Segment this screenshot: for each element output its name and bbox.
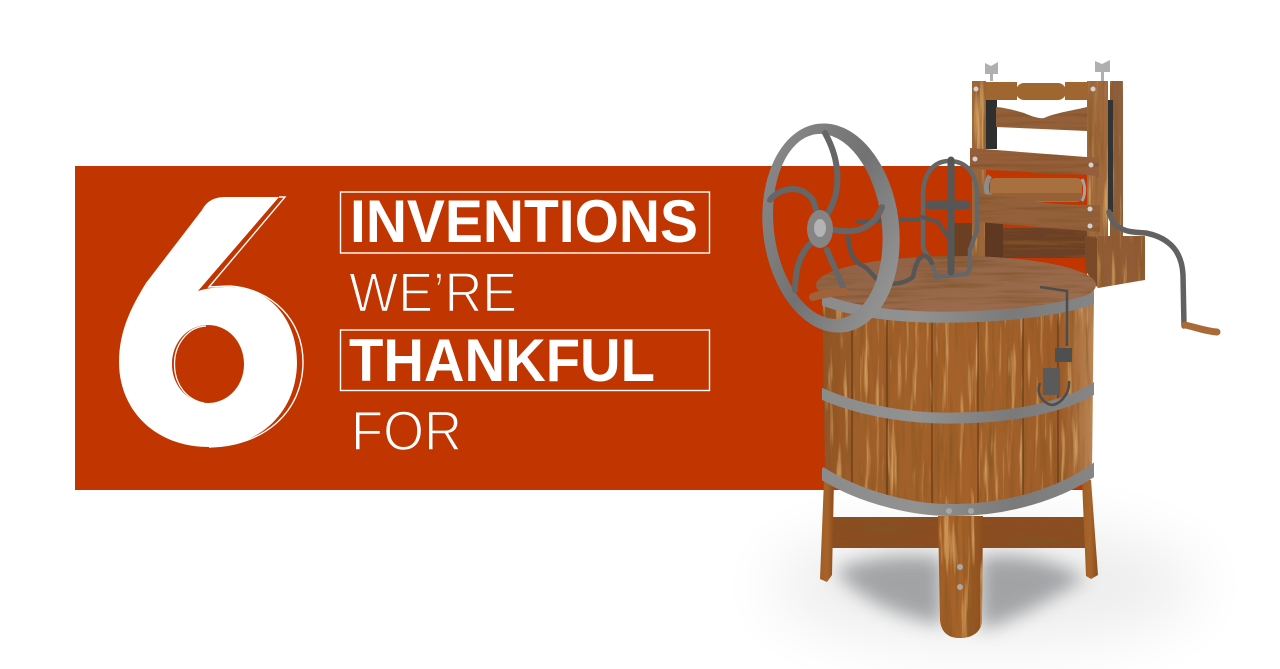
lower board xyxy=(978,193,1100,232)
heading: FOR: FOR xyxy=(351,399,462,462)
spring xyxy=(986,100,997,149)
wheel handle xyxy=(813,292,844,297)
heading: THANKFUL: THANKFUL xyxy=(349,327,655,394)
agitator mechanism xyxy=(848,160,977,284)
red banner xyxy=(75,166,1087,490)
barrel lid xyxy=(816,256,1096,314)
floor shadow xyxy=(770,525,1200,645)
wringer frame xyxy=(953,60,1145,288)
top handle bar xyxy=(986,82,1088,100)
legs xyxy=(820,480,1098,582)
roller xyxy=(990,178,1082,202)
side box xyxy=(1085,236,1145,288)
bolts xyxy=(972,86,1096,228)
big numeral 6 xyxy=(119,197,303,447)
metal bands xyxy=(818,297,1098,510)
washing machine illustration xyxy=(751,60,1217,645)
thumb screws xyxy=(985,60,1110,81)
heading: WE'RE: WE’RE xyxy=(349,260,517,324)
flywheel xyxy=(751,115,911,341)
cross board xyxy=(970,148,1099,177)
upper board xyxy=(996,107,1087,131)
center leg xyxy=(938,508,983,638)
latch and side fittings xyxy=(1039,287,1072,405)
barrel body xyxy=(822,285,1094,512)
heading: INVENTIONS: INVENTIONS xyxy=(350,188,698,255)
crank handle xyxy=(1109,212,1217,332)
